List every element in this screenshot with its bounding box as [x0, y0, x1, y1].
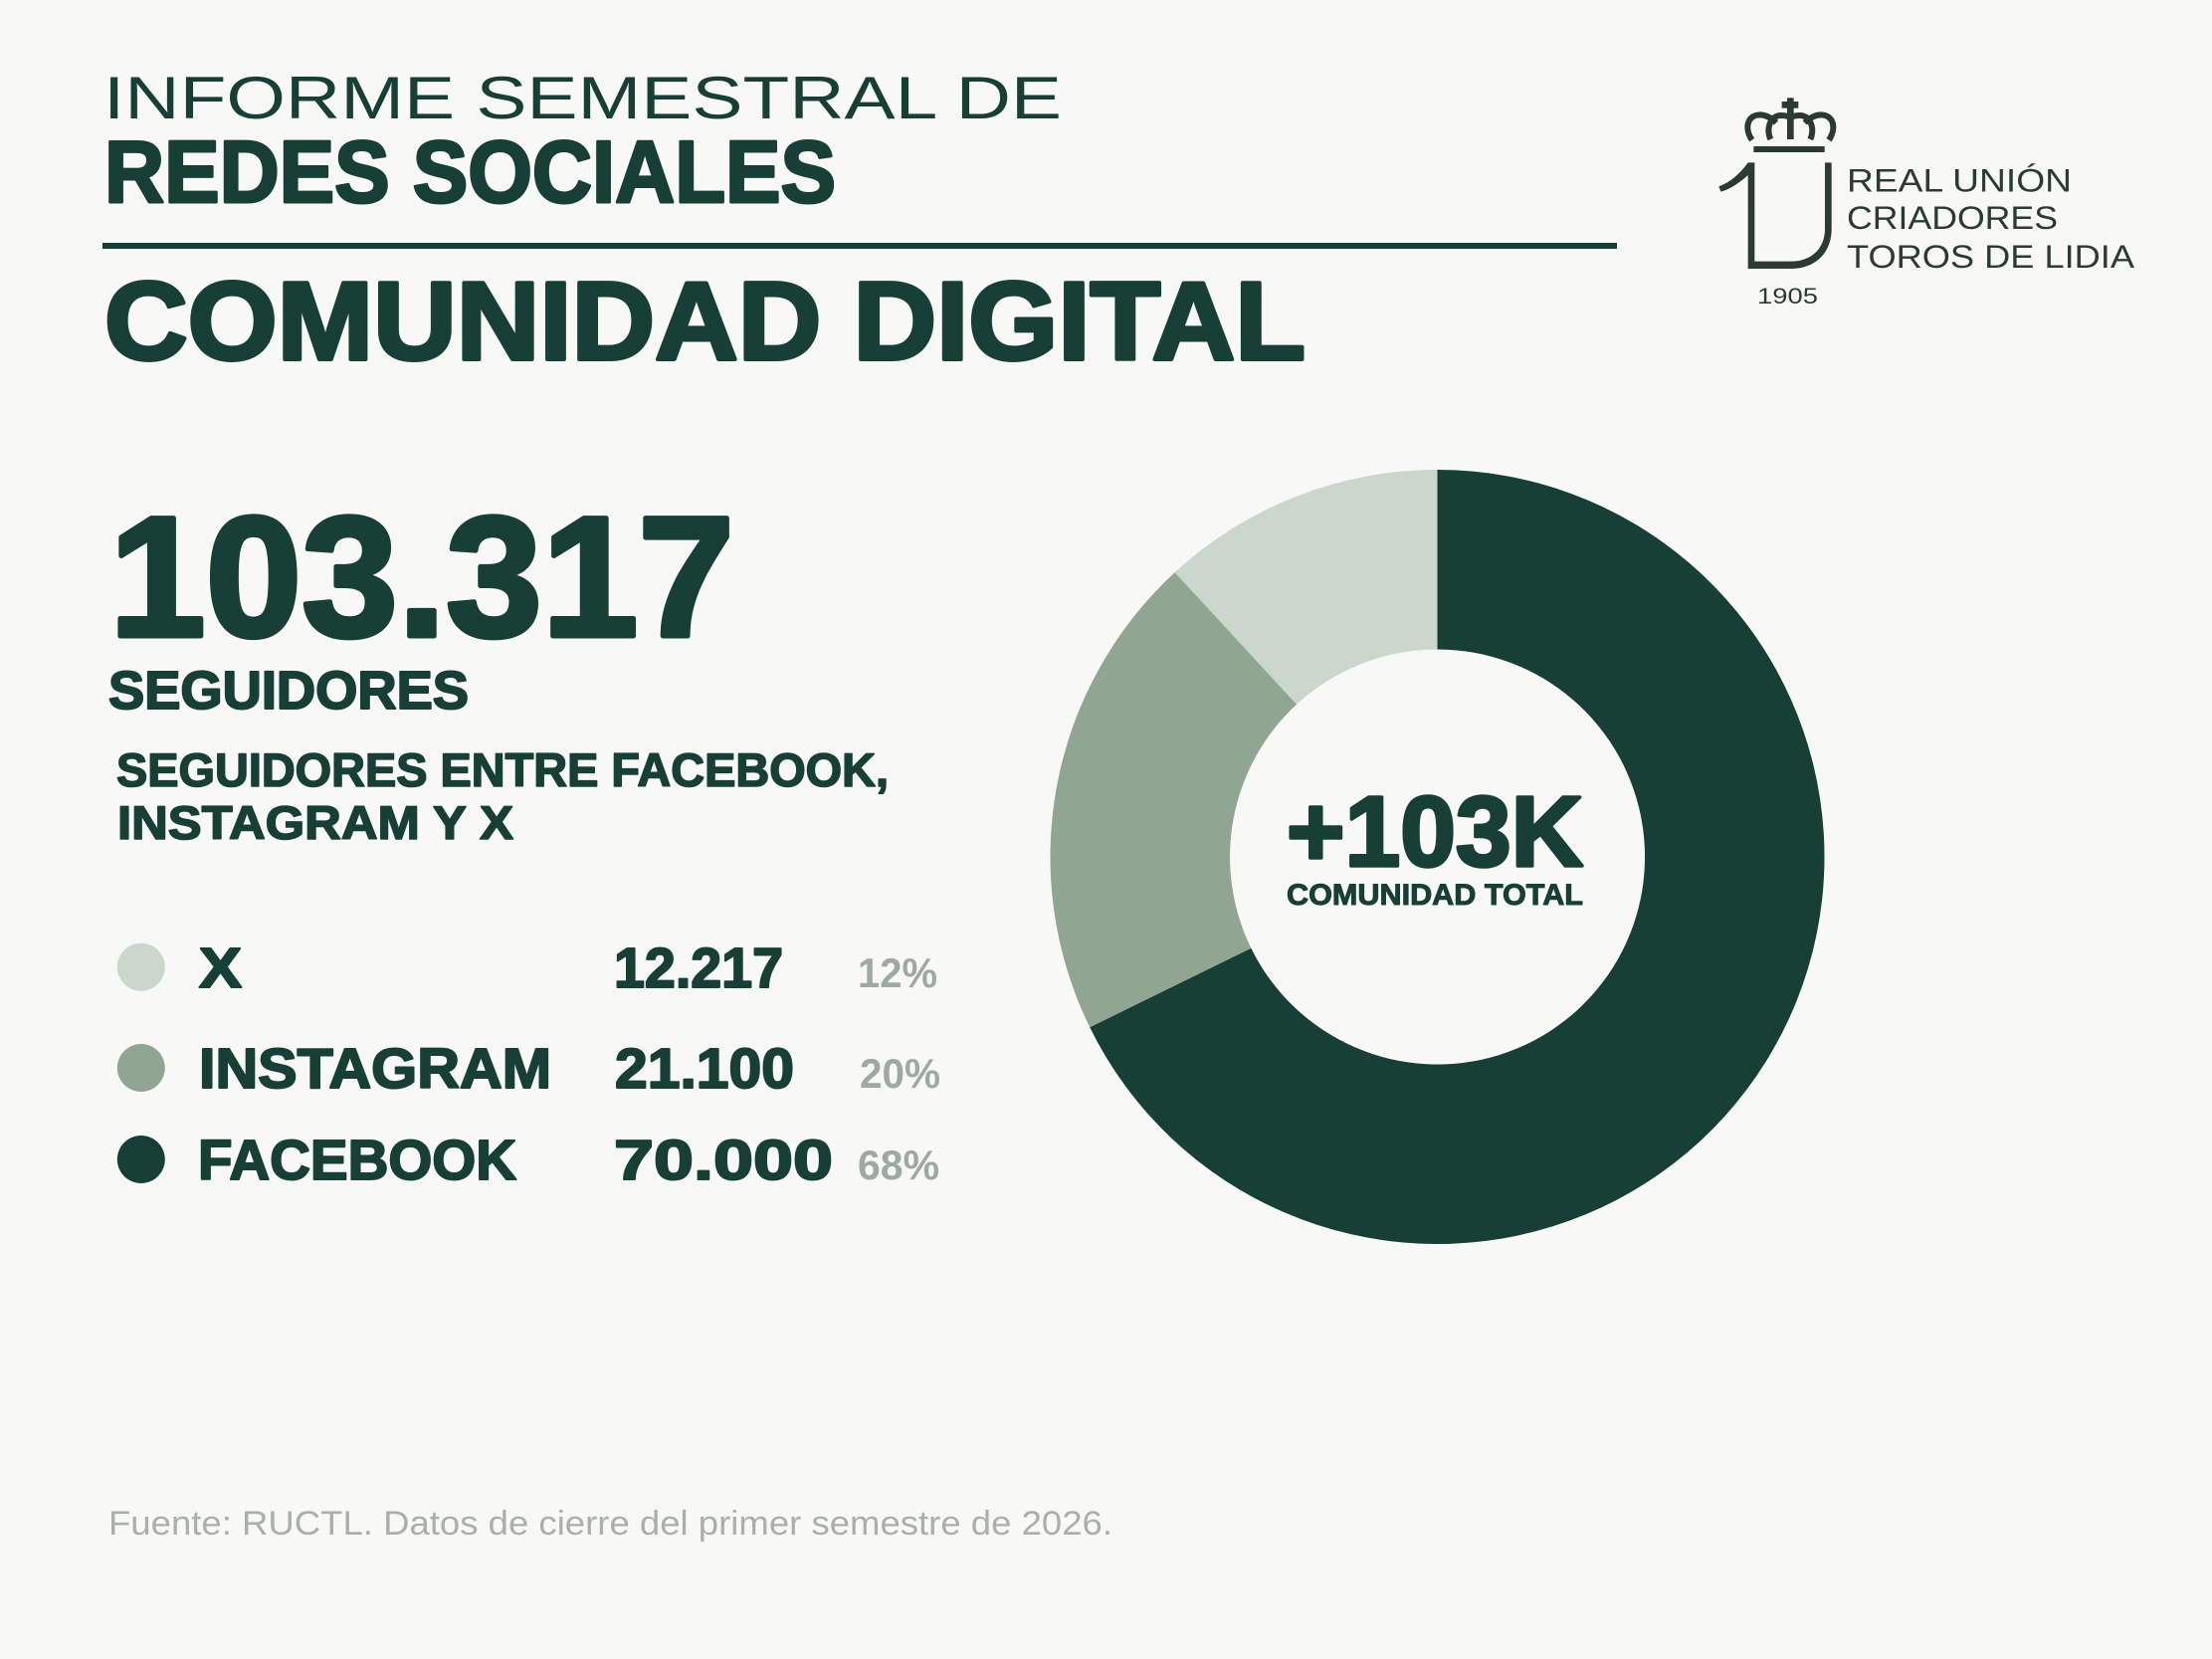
segment: Facebook 68%	[1090, 470, 1825, 1244]
icon: crown	[1747, 98, 1833, 152]
big number: 103.317	[109, 482, 734, 673]
legend row: X: 12.217	[614, 936, 783, 1000]
icon: monogram 1U	[1718, 162, 1832, 269]
legend row: Instagram: 21.100	[615, 1037, 794, 1101]
heading: redes sociales: REDES SOCIALES	[104, 122, 836, 221]
donut chart	[1050, 470, 1825, 1244]
legend	[117, 936, 940, 1192]
heading: comunidad digital: COMUNIDAD DIGITAL	[104, 260, 1306, 383]
segment: X 12%	[1175, 470, 1437, 705]
footer source note: Fuente: RUCTL. Datos de cierre del primer semestre de 2026.	[108, 1505, 1112, 1543]
logo year: 1905	[1757, 284, 1818, 309]
donut centre value: +103K	[1287, 776, 1583, 888]
label: seguidores: SEGUIDORES	[108, 661, 469, 721]
total followers block	[108, 482, 889, 849]
logo wordmark: REAL UNIÓN	[1847, 163, 2072, 199]
donut centre label: COMUNIDAD TOTAL	[1287, 879, 1583, 912]
description: SEGUIDORES ENTRE FACEBOOK,	[116, 743, 889, 796]
heading: informe semestral de: INFORME SEMESTRAL DE	[103, 65, 1062, 131]
segment: Instagram 20%	[1050, 572, 1297, 1027]
legend row: Facebook	[117, 1129, 939, 1192]
legend row: Instagram: INSTAGRAM	[199, 1037, 551, 1101]
legend row: Facebook: FACEBOOK	[198, 1129, 516, 1192]
logo wordmark	[1847, 163, 2135, 275]
legend row: Instagram: 20%	[860, 1050, 940, 1097]
logo: Real Unión Criadores Toros de Lidia	[1718, 98, 2135, 309]
logo wordmark: TOROS DE LIDIA	[1847, 239, 2135, 275]
legend row: Facebook: 70.000	[614, 1129, 833, 1192]
legend row: Facebook: 68%	[858, 1141, 939, 1188]
description	[116, 743, 889, 849]
legend row: X	[117, 936, 937, 1000]
divider rule	[102, 243, 1617, 249]
logo wordmark: CRIADORES	[1847, 200, 2058, 236]
legend row: X: X	[199, 936, 242, 1000]
description: INSTAGRAM Y X	[117, 796, 513, 849]
header: report title block	[102, 65, 1617, 383]
legend row: Instagram	[117, 1037, 940, 1101]
legend row: X: 12%	[858, 949, 937, 996]
